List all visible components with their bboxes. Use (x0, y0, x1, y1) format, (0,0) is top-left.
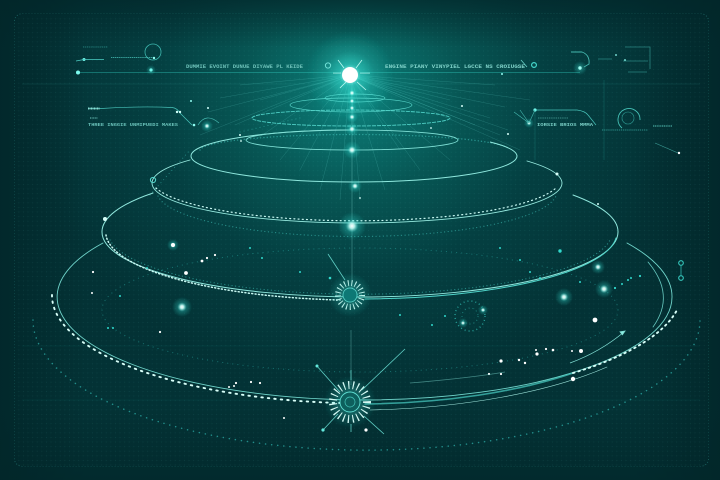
ring 3 (191, 130, 517, 182)
guide lines (22, 80, 700, 400)
left header text: DUMMIE EVOINT DUNUE DIYAWE PL KEIDE (186, 64, 304, 70)
upper field sparkle points (103, 105, 599, 221)
ray fan from the apex (200, 75, 530, 200)
right lower text: IORSIE BRIOS MMMA (537, 122, 593, 128)
left header connector (76, 44, 340, 75)
right header text: ENGINE PIANY VINYPIEL LGCCE NS CROIUGSE (385, 64, 526, 70)
right header connector (360, 47, 650, 75)
ring 2 (252, 110, 450, 126)
swirl cluster (455, 301, 488, 331)
right gauge icon (602, 109, 680, 154)
outer dotted orbit (33, 248, 700, 450)
axis nodes (338, 87, 366, 240)
apex light (306, 31, 394, 119)
ring 4 (150, 160, 562, 223)
scattered cyan particles (107, 247, 641, 329)
ring 1 (290, 94, 412, 112)
ring 6 (52, 243, 677, 410)
particle haze along rings (110, 118, 610, 294)
left lower callout (88, 100, 219, 132)
left lower text: THREE INGGIE UNMIPUEDI MAKES (88, 122, 178, 128)
right lower callout (514, 108, 596, 128)
sunburst node lower (316, 349, 405, 434)
right chain icon (679, 261, 683, 280)
sunburst node upper (328, 254, 372, 317)
central axis line (351, 75, 352, 385)
orbit arrow (410, 331, 625, 383)
star field (91, 239, 613, 432)
ring 5 (102, 193, 618, 300)
